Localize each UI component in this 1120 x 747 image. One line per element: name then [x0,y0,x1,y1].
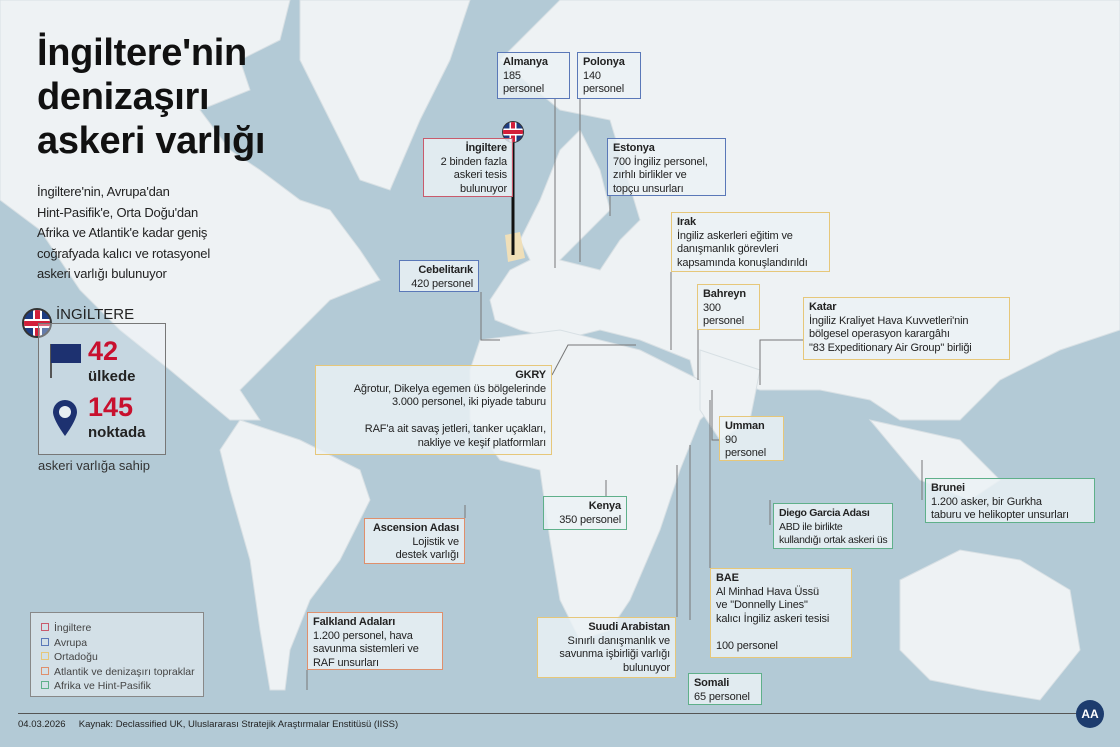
box: GKRY: Ağrotur, Dikelya egemen üs bölgelerinde [354,382,546,394]
box: Kenya: 350 personel [559,514,621,526]
box: BAE: 100 personel [716,640,778,652]
box: Umman: 90 [725,434,737,446]
box: Brunei: 1.200 asker, bir Gurkha [931,496,1042,508]
logo: AA: AA [1081,707,1099,721]
legend: Ortadoğu [54,651,98,663]
legend: Atlantik ve denizaşırı topraklar [54,666,195,678]
icon: pin [53,400,77,436]
subtitle [37,184,210,281]
box: Somali: 65 personel [694,690,750,702]
box: GKRY: RAF'a ait savaş jetleri, tanker uçakları, [365,423,546,435]
box: Irak: danışmanlık görevleri [677,243,778,255]
box: Kenya [543,496,627,530]
box: İngiltere [423,138,513,197]
box: Brunei: taburu ve helikopter unsurları [931,509,1069,521]
footer: date and source: 04.03.2026 Kaynak: Declassified UK, Uluslararası Stratejik Araştırmalar Enstitüsü (IISS) [18,719,398,730]
box: BAE: Al Minhad Hava Üssü [716,586,819,598]
box: İngiltere: 2 binden fazla [441,156,507,168]
box: GKRY: 3.000 personel, iki piyade taburu [392,396,546,408]
box: Estonya: 700 İngiliz personel, [613,156,708,168]
box: Somali: Somali [694,677,729,689]
box: İngiltere: İngiltere [466,142,507,154]
title: denizaşırı [37,76,209,118]
subtitle: coğrafyada kalıcı ve rotasyonel [37,246,210,260]
box: Umman [719,416,784,461]
icon: uk flag [22,308,52,338]
box: Katar: İngiliz Kraliyet Hava Kuvvetleri'nin [809,314,968,326]
box: Bahreyn [697,284,760,330]
box: BAE: BAE [716,572,739,584]
box: Ascension: destek varlığı [396,549,459,561]
box: Diego Garcia: ABD ile birlikte [779,520,842,532]
box: Diego Garcia [773,503,893,549]
box: Irak: Irak [677,216,696,228]
stats panel: askeri varlığa sahip [38,458,150,473]
box: Suudi Arabistan: Suudi Arabistan [588,621,670,633]
subtitle: Hint-Pasifik'e, Orta Doğu'dan [37,204,198,220]
box: Estonya: zırhlı birlikler ve [613,169,687,181]
legend: Avrupa [54,636,87,648]
box: Brunei [925,478,1095,523]
box: Falkland: 1.200 personel, hava [313,630,413,642]
box: Falkland: Falkland Adaları [313,616,395,628]
box: BAE: kalıcı İngiliz askeri tesisi [716,612,829,624]
box: Almanya: personel [503,83,544,95]
box: Estonya [607,138,726,196]
box: Falkland: savunma sistemleri ve [313,643,419,655]
box: İngiltere: bulunuyor [460,182,507,194]
box: Estonya: Estonya [613,142,655,154]
box: Bahreyn: Bahreyn [703,288,746,300]
title: İngiltere'nin [37,32,247,74]
title [37,32,265,162]
stats panel: 42 [88,336,118,366]
title: askeri varlığı [37,120,265,162]
box: Polonya: 140 [583,70,601,82]
box: Suudi Arabistan [537,617,676,678]
box: Suudi Arabistan: Sınırlı danışmanlık ve [568,634,670,646]
box: Katar: bölgesel operasyon karargâhı [809,328,950,340]
box: Estonya: topçu unsurları [613,182,684,194]
stats panel [22,306,166,473]
box: Cebelitarık [399,260,479,292]
box: Falkland [307,612,443,670]
box: Polonya: personel [583,83,624,95]
subtitle: askeri varlığı bulunuyor [37,266,167,281]
box: Cebelitarık: Cebelitarık [418,264,473,276]
legend [30,612,204,697]
icon: uk flag pin [502,121,524,143]
box: BAE: ve "Donnelly Lines" [716,599,808,611]
box: Ascension: Lojistik ve [412,536,459,548]
stats panel: İNGİLTERE [56,306,134,323]
box: Katar: Katar [809,301,836,313]
subtitle: İngiltere'nin, Avrupa'dan [37,184,170,199]
box: Ascension: Ascension Adası [373,522,459,534]
box: Bahreyn: personel [703,315,744,327]
box: Diego Garcia: Diego Garcia Adası [779,507,870,519]
stats panel: noktada [88,424,146,441]
box: İngiltere: askeri tesis [454,169,507,181]
stats panel: ülkede [88,368,136,385]
box: Falkland: RAF unsurları [313,656,379,668]
box: Almanya: Almanya [503,56,548,68]
box: Brunei: Brunei [931,482,965,494]
box: Kenya: Kenya [589,500,621,512]
box: Almanya: 185 [503,70,521,82]
box: Irak: kapsamında konuşlandırıldı [677,256,808,268]
box: Umman: personel [725,447,766,459]
legend: İngiltere [54,622,91,634]
box: Suudi Arabistan: bulunuyor [623,662,670,674]
box: Katar: "83 Expeditionary Air Group" birliği [809,342,972,354]
legend: Afrika ve Hint-Pasifik [54,680,151,692]
box: Irak [671,212,830,272]
stats panel: 145 [88,392,133,422]
subtitle: Afrika ve Atlantik'e kadar geniş [37,225,207,240]
logo: AA [1076,700,1104,728]
box: Polonya: Polonya [583,56,625,68]
box: Cebelitarık: 420 personel [411,278,473,290]
box: BAE [710,568,852,658]
box: Polonya [577,52,641,99]
box: GKRY: GKRY [515,369,546,381]
box: Umman: Umman [725,420,765,432]
box: Katar [803,297,1010,360]
box: Ascension [364,518,465,564]
box: Irak: İngiliz askerleri eğitim ve [677,230,793,242]
box: Almanya [497,52,570,99]
box: Suudi Arabistan: savunma işbirliği varlığı [559,648,670,660]
box: Bahreyn: 300 [703,302,721,314]
box: GKRY: nakliye ve keşif platformları [418,436,546,448]
icon: flag [50,344,52,378]
box: Somali [688,673,762,705]
box: Diego Garcia: kullandığı ortak askeri üs [779,534,887,546]
box: GKRY [315,365,552,455]
